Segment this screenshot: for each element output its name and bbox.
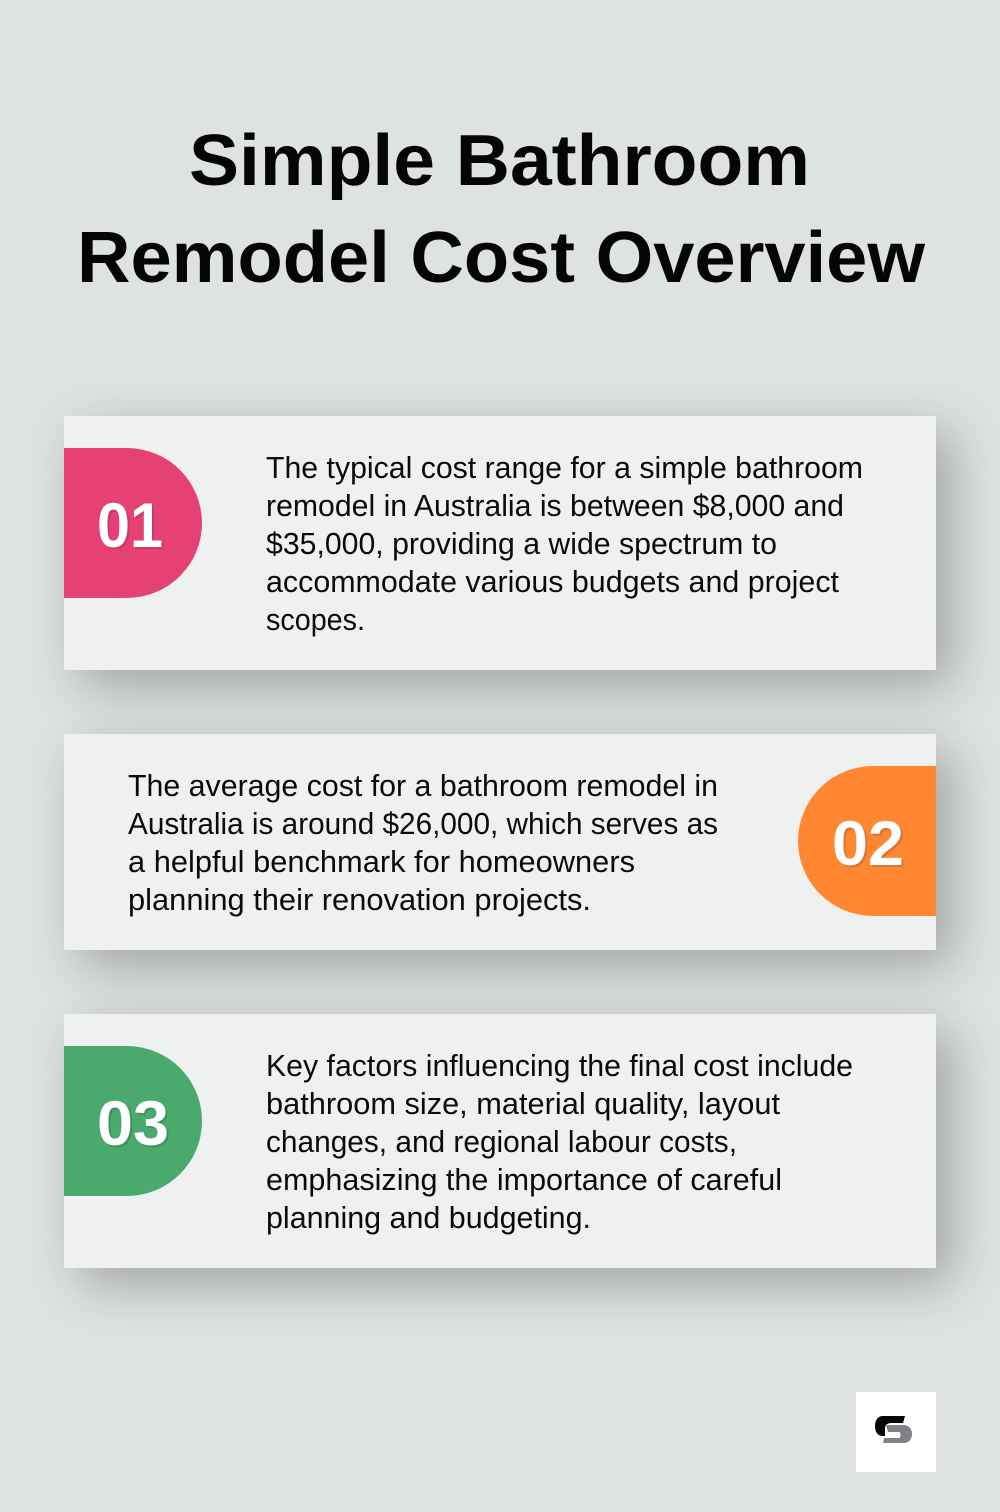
text: cost range: accommodate various budgets and project [266,565,840,599]
badge 03: 03 [97,1089,169,1159]
badge 02: 02 [834,811,906,881]
text: cost range: $35,000, providing a wide spectrum to [266,527,777,561]
text: average cost: Australia is around $26,000, which serves as [128,807,718,841]
badge 01 [64,448,202,598]
text: cost range: The typical cost range for a simple bathroom [266,451,863,485]
title: Remodel Cost Overview [77,218,926,298]
panel: average cost [64,734,936,950]
text: average cost: The average cost for a bathroom remodel in [128,769,718,803]
text: cost range [266,451,863,637]
badge 01: 01 [97,491,163,561]
badge 03: 03 [99,1091,171,1161]
text: key factors: changes, and regional labour costs, [266,1125,737,1159]
title: Simple Bathroom [189,121,810,201]
badge 02: 02 [832,809,904,879]
text: key factors: bathroom size, material quality, layout [266,1087,781,1121]
text: key factors [266,1049,853,1235]
badge 03 [64,1046,202,1196]
text: average cost: a helpful benchmark for homeowners [128,845,635,879]
panel: cost range [64,416,936,670]
text: key factors: planning and budgeting. [266,1201,591,1235]
title [77,121,926,298]
badge 01: 01 [99,493,165,563]
panel: key factors [64,1014,936,1268]
text: cost range: remodel in Australia is between $8,000 and [266,489,844,523]
text: key factors: emphasizing the importance of careful [266,1163,782,1197]
text: average cost [128,769,718,917]
text: average cost: planning their renovation projects. [128,883,591,917]
logo [856,1392,936,1472]
text: key factors: Key factors influencing the final cost include [266,1049,853,1083]
text: cost range: scopes. [266,603,365,637]
badge 02 [798,766,936,916]
